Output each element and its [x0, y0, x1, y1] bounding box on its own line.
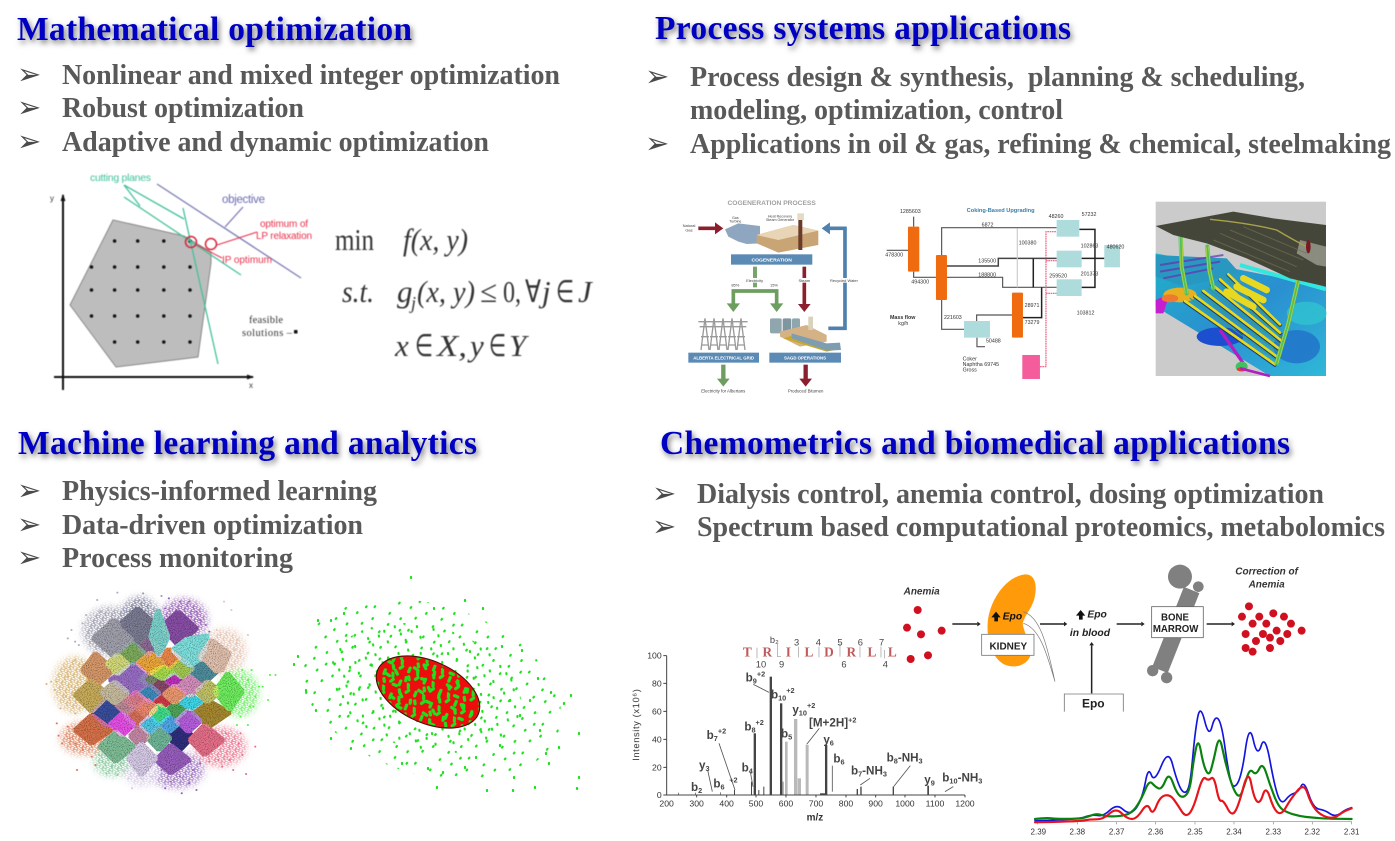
chart: peptide mass spectrum: 7 [879, 638, 884, 648]
diagram: cogeneration process [683, 200, 859, 394]
diagram: coking-based upgrading flow: 1285603 [900, 209, 921, 215]
chart: peptide mass spectrum: 6 [720, 783, 725, 792]
chart: peptide mass spectrum: 4 [883, 659, 888, 669]
chart: peptide mass spectrum: 9 [753, 677, 757, 686]
diagram: cogeneration process: ALBERTA ELECTRICAL GRID [693, 355, 754, 360]
diagram: cogeneration process: 15% [770, 283, 778, 288]
bullet list: machine learning topics: Process monitoring [62, 543, 293, 574]
bullet list: biomedical topics: Spectrum based computational proteomics, metabolomics [697, 512, 1385, 543]
formula: optimization problem: (x, y) [417, 274, 475, 309]
chart: peptide mass spectrum: 20 [652, 762, 662, 772]
chart: peptide mass spectrum: 7 [858, 769, 862, 778]
diagram: cogeneration process: Electricity [746, 278, 763, 283]
chart: integer programming polytope with cutting planes: LP relaxation [256, 231, 312, 242]
chart: peptide mass spectrum: 2 [698, 786, 702, 795]
diagram: cogeneration process: Heat Recovery [768, 214, 792, 218]
stipple over outer cloud [31, 583, 281, 803]
chart: spectral line traces in blue, green and red: 2.33 [1266, 827, 1282, 836]
diagram: erythropoietin anemia pathway: Epo [1003, 611, 1022, 622]
chart: peptide mass spectrum: b [691, 781, 698, 794]
bullet list: process systems topics: modeling, optimization, control [690, 95, 1063, 126]
chart: peptide mass spectrum: +2 [807, 701, 815, 710]
chart: peptide mass spectrum: 9 [931, 778, 935, 787]
chart: peptide mass spectrum: 700 [809, 798, 823, 808]
diagram: coking-based upgrading flow: 135500 [978, 258, 996, 264]
bullet list: optimization topics: Nonlinear and mixed integer optimization [62, 60, 560, 91]
formula: optimization problem: ∈ [556, 274, 574, 309]
bullet list: optimization topics: Adaptive and dynamic optimization [62, 127, 489, 158]
heading: mathematical optimization: Mathematical optimization [17, 11, 412, 48]
formula: optimization problem: Y [509, 328, 529, 363]
chart: peptide mass spectrum: 8 [894, 757, 898, 766]
diagram: coking-based upgrading flow: 6872 [982, 223, 994, 229]
diagram: erythropoietin anemia pathway: Correction of [1235, 566, 1300, 577]
chart: peptide mass spectrum: b [851, 764, 858, 777]
panel: machine learning and analytics [17, 425, 585, 813]
chart: peptide mass spectrum: 400 [719, 798, 734, 808]
formula: optimization problem: x [394, 328, 409, 363]
chart: peptide mass spectrum: -NH [898, 752, 919, 765]
formula: optimization problem: j [409, 293, 416, 313]
chart: peptide mass spectrum: 9 [779, 659, 784, 669]
formula: optimization problem: g [397, 274, 412, 309]
chart: peptide mass spectrum: L [805, 645, 814, 660]
chart: peptide mass spectrum: b [746, 672, 753, 685]
chart: peptide mass spectrum: y [823, 733, 830, 746]
chart: peptide mass spectrum: +2 [848, 716, 857, 725]
diagram: cogeneration process: COGENERATION PROCESS [728, 200, 816, 207]
chart: peptide mass spectrum: b [742, 762, 749, 775]
chart: peptide mass spectrum: R [762, 645, 772, 660]
diagram: cogeneration process: Steam Generator [766, 218, 795, 222]
diagram: cogeneration process: Steam [799, 278, 811, 283]
formula: optimization problem: j [538, 274, 551, 309]
chart: peptide mass spectrum: [M+2H] [809, 717, 848, 730]
chart: peptide mass spectrum: 800 [839, 798, 853, 808]
diagram: cogeneration process: Natural [683, 223, 696, 228]
bullet list: optimization topics: ➢ [17, 90, 41, 124]
chart: integer programming polytope with cutting planes: y [50, 194, 54, 203]
chart: peptide mass spectrum: 3 [794, 638, 799, 648]
diagram: coking-based upgrading flow: 201373 [1081, 271, 1098, 277]
bullet list: optimization topics: ➢ [17, 57, 41, 91]
chart: spectral line traces in blue, green and red: 2.36 [1148, 827, 1164, 836]
diagram: coking-based upgrading flow: 480620 [1107, 245, 1124, 251]
chart: integer programming polytope with cutting planes: feasible [249, 315, 283, 326]
chart: peptide mass spectrum: 100 [647, 651, 662, 661]
formula: optimization problem: s.t. [342, 274, 374, 309]
chart: peptide mass spectrum: 60 [652, 706, 662, 716]
chart: peptide mass spectrum: 80 [652, 678, 662, 688]
diagram: coking-based upgrading flow: Coker [963, 357, 977, 363]
diagram: erythropoietin anemia pathway: Anemia [903, 586, 940, 597]
bullet list: process systems topics: Applications in oil & gas, refining & chemical, steelmaking [690, 129, 1391, 160]
diagram: coking-based upgrading flow: 221603 [944, 315, 962, 321]
chart: peptide mass spectrum: 5 [788, 733, 792, 742]
bullet list: biomedical topics [652, 476, 1385, 543]
bullet list: optimization topics: Robust optimization [62, 93, 304, 124]
diagram: cogeneration process: Gas [732, 216, 739, 220]
bullet list: machine learning topics: Physics-informed learning [62, 476, 377, 507]
chart: peptide mass spectrum: 6 [830, 738, 834, 747]
diagram: coking-based upgrading flow: 188800 [978, 273, 996, 279]
diagram: cogeneration process: SAGD OPERATIONS [784, 355, 826, 360]
diagram: coking-based upgrading flow: 48260 [1049, 214, 1063, 220]
chart: peptide mass spectrum: 40 [652, 734, 662, 744]
bullet list: biomedical topics: Dialysis control, anemia control, dosing optimization [697, 479, 1324, 510]
chart: peptide mass spectrum: y [699, 759, 705, 772]
chart: integer programming polytope with cutting planes: objective [222, 194, 265, 206]
bullet list: machine learning topics: ➢ [17, 540, 41, 574]
chart: peptide mass spectrum: 500 [749, 798, 763, 808]
chart: peptide mass spectrum: m/z [807, 813, 823, 824]
chart: peptide mass spectrum: D [824, 645, 834, 660]
chart: peptide mass spectrum: 10 [949, 777, 958, 786]
chart: peptide mass spectrum: y [792, 703, 799, 716]
chart: integer programming polytope with cutting planes: x [249, 381, 253, 390]
chart: spectral line traces in blue, green and red [1031, 711, 1360, 836]
diagram: erythropoietin anemia pathway [903, 565, 1306, 712]
formula: optimization problem: 0, [503, 274, 521, 309]
chart: peptide mass spectrum: 300 [689, 798, 704, 808]
chart: integer programming polytope with cutting planes: optimum of [260, 219, 308, 230]
formula: optimization problem: ∈ [489, 328, 506, 363]
diagram: coking-based upgrading flow: 50488 [986, 339, 1001, 345]
diagram: erythropoietin anemia pathway: KIDNEY [989, 641, 1028, 652]
chart: peptide mass spectrum: 4 [816, 638, 821, 648]
diagram: coking-based upgrading flow: 100380 [1019, 241, 1036, 247]
chart: peptide mass spectrum: 10 [778, 693, 786, 702]
bullet list: machine learning topics: ➢ [17, 507, 41, 541]
formula: optimization problem: X, [435, 328, 467, 363]
diagram: cogeneration process: COGENERATION [751, 257, 792, 263]
heading: process systems applications: Process systems applications [655, 10, 1071, 47]
chart: spectral line traces in blue, green and red: 2.35 [1187, 827, 1203, 836]
chart: peptide mass spectrum: +2 [786, 686, 795, 695]
diagram: coking-based upgrading flow: Gross [963, 367, 977, 373]
chart: peptide mass spectrum [631, 635, 982, 824]
formula: optimization problem: f(x, y) [403, 222, 468, 257]
bullet list: machine learning topics: Data-driven optimization [62, 510, 363, 541]
chart: peptide mass spectrum: 5 [837, 638, 843, 648]
bullet list: machine learning topics [17, 473, 377, 574]
bullet list: process systems topics [645, 59, 1391, 160]
chart: peptide mass spectrum: 6 [841, 659, 847, 669]
formula: optimization problem: ∈ [415, 328, 433, 363]
chart: peptide mass spectrum: 6 [858, 638, 863, 648]
diagram: erythropoietin anemia pathway: MARROW [1153, 624, 1199, 635]
chart: integer programming polytope with cutting planes [50, 172, 312, 390]
chart: peptide mass spectrum: -NH [862, 764, 883, 777]
chart: peptide mass spectrum: 8 [751, 725, 756, 734]
formula: optimization problem: ≤ [480, 274, 497, 309]
bullet list: process systems topics: ➢ [645, 126, 669, 160]
bullet list: process systems topics: ➢ [645, 59, 669, 93]
chart: peptide mass spectrum: 3 [883, 769, 887, 778]
chart: peptide mass spectrum: 6 [840, 758, 845, 767]
chart: spectral line traces in blue, green and red: 2.34 [1226, 827, 1242, 836]
chart: peptide mass spectrum: b [887, 752, 894, 765]
chart: peptide mass spectrum: b₂ [770, 635, 779, 645]
chart: spectral line traces in blue, green and red: 2.38 [1070, 827, 1086, 836]
chart: peptide mass spectrum: b [744, 720, 751, 733]
diagram: coking-based upgrading flow: 73279 [1025, 320, 1039, 326]
chart: peptide mass spectrum: 10 [756, 659, 766, 669]
chart: integer programming polytope with cutting planes: cutting planes [90, 172, 151, 184]
diagram: coking-based upgrading flow: 259520 [1049, 274, 1067, 280]
chart: peptide mass spectrum: 0 [657, 790, 662, 800]
panel: chemometrics and biomedical applications [631, 425, 1385, 836]
chart: peptide mass spectrum: 3 [705, 764, 710, 773]
chart: peptide mass spectrum: T [743, 645, 752, 660]
bullet list: machine learning topics: ➢ [17, 473, 41, 507]
diagram: coking-based upgrading flow: 102863 [1081, 243, 1098, 249]
chart: peptide mass spectrum: +2 [757, 669, 765, 678]
chart: peptide mass spectrum: b [942, 772, 949, 785]
chart: peptide mass spectrum: b [833, 753, 840, 766]
diagram: cogeneration process: Electricity for Albertans [701, 389, 745, 394]
chart: peptide mass spectrum: 10 [799, 708, 807, 717]
diagram: erythropoietin anemia pathway: Anemia [1248, 579, 1285, 590]
heading: machine learning and analytics: Machine learning and analytics [18, 425, 477, 462]
diagram: coking-based upgrading flow [885, 208, 1124, 379]
chart: peptide mass spectrum: 200 [659, 798, 674, 808]
formula: optimization problem [335, 222, 593, 363]
diagram: erythropoietin anemia pathway: Epo [1087, 610, 1107, 621]
diagram: coking-based upgrading flow: Coking-Based Upgrading [967, 208, 1035, 214]
chart: peptide mass spectrum: 1100 [926, 798, 944, 808]
image: 3D reservoir well visualization [1156, 202, 1327, 376]
diagram: coking-based upgrading flow: Naphtha 69745 [963, 362, 999, 368]
diagram: cogeneration process: Recycled Water [830, 278, 859, 283]
diagram: cogeneration process: Gas [685, 227, 693, 232]
formula: optimization problem: ∀ [525, 274, 541, 309]
chart: peptide mass spectrum: 7 [714, 734, 718, 743]
diagram: coking-based upgrading flow: kg/h [898, 321, 908, 327]
chart: peptide mass spectrum: 3 [919, 757, 923, 766]
chart: peptide mass spectrum: 600 [779, 798, 793, 808]
chart: peptide mass spectrum: Intensity (x10⁶) [631, 689, 641, 761]
chart: peptide mass spectrum: 900 [868, 798, 883, 808]
chart: peptide mass spectrum: b [707, 729, 714, 742]
chart: integer programming polytope with cutting planes: IP optimum [222, 255, 272, 266]
chart: clustered scatter with coloured cells [31, 583, 281, 803]
chart: peptide mass spectrum: y [924, 773, 931, 786]
diagram: cogeneration process: Produced Bitumen [788, 389, 824, 394]
panel: process systems applications [645, 10, 1391, 394]
diagram: coking-based upgrading flow: 494300 [911, 280, 929, 286]
formula: optimization problem: y [467, 328, 484, 363]
diagram: coking-based upgrading flow: 28971 [1025, 303, 1039, 309]
chart: spectral line traces in blue, green and red: 2.37 [1109, 827, 1125, 836]
chart: peptide mass spectrum: +2 [756, 718, 764, 727]
chart: spectral line traces in blue, green and red: 2.39 [1031, 827, 1047, 836]
diagram: erythropoietin anemia pathway: in blood [1070, 628, 1111, 639]
chart: spectral line traces in blue, green and red: 2.32 [1305, 827, 1321, 836]
bullet list: optimization topics [17, 57, 560, 158]
chart: peptide mass spectrum: b [781, 728, 788, 741]
chart: green scatter with red anomaly ellipse [275, 567, 585, 813]
diagram: coking-based upgrading flow: 478300 [885, 253, 903, 259]
formula: optimization problem: min [335, 222, 374, 257]
diagram: erythropoietin anemia pathway: Epo [1082, 697, 1105, 711]
chart: peptide mass spectrum: 1000 [895, 798, 915, 808]
chart: peptide mass spectrum: 4 [749, 767, 754, 776]
chart: spectral line traces in blue, green and red: 2.31 [1344, 827, 1360, 836]
diagram: coking-based upgrading flow: Mass flow [890, 315, 916, 321]
diagram: coking-based upgrading flow: 103812 [1077, 310, 1094, 316]
chart: peptide mass spectrum: I [786, 645, 791, 660]
panel: mathematical optimization [17, 11, 593, 390]
diagram: coking-based upgrading flow: 57232 [1082, 212, 1096, 218]
chart: peptide mass spectrum: 1200 [955, 798, 975, 808]
diagram: erythropoietin anemia pathway: BONE [1161, 613, 1189, 624]
formula: optimization problem: J [578, 274, 593, 309]
bullet list: biomedical topics: ➢ [652, 509, 676, 543]
chart: integer programming polytope with cutting planes: solutions – [242, 328, 293, 339]
heading: chemometrics and biomedical applications: Chemometrics and biomedical applications [660, 425, 1290, 462]
chart: peptide mass spectrum: 3 [978, 777, 982, 786]
bullet list: biomedical topics: ➢ [652, 476, 676, 510]
chart: peptide mass spectrum: -NH [958, 772, 978, 785]
diagram: cogeneration process: Turbine [729, 219, 741, 223]
chart: peptide mass spectrum: b [771, 688, 778, 701]
diagram: cogeneration process: 85% [731, 283, 740, 288]
chart: peptide mass spectrum: b [713, 778, 720, 791]
bullet list: optimization topics: ➢ [17, 124, 41, 158]
chart: peptide mass spectrum: R [846, 645, 856, 660]
chart: peptide mass spectrum: L [888, 645, 897, 660]
chart: peptide mass spectrum: L [868, 645, 877, 660]
chart: peptide mass spectrum: +2 [729, 775, 738, 784]
chart: peptide mass spectrum: +2 [718, 727, 726, 736]
bullet list: process systems topics: Process design & synthesis, planning & scheduling, [690, 62, 1305, 93]
